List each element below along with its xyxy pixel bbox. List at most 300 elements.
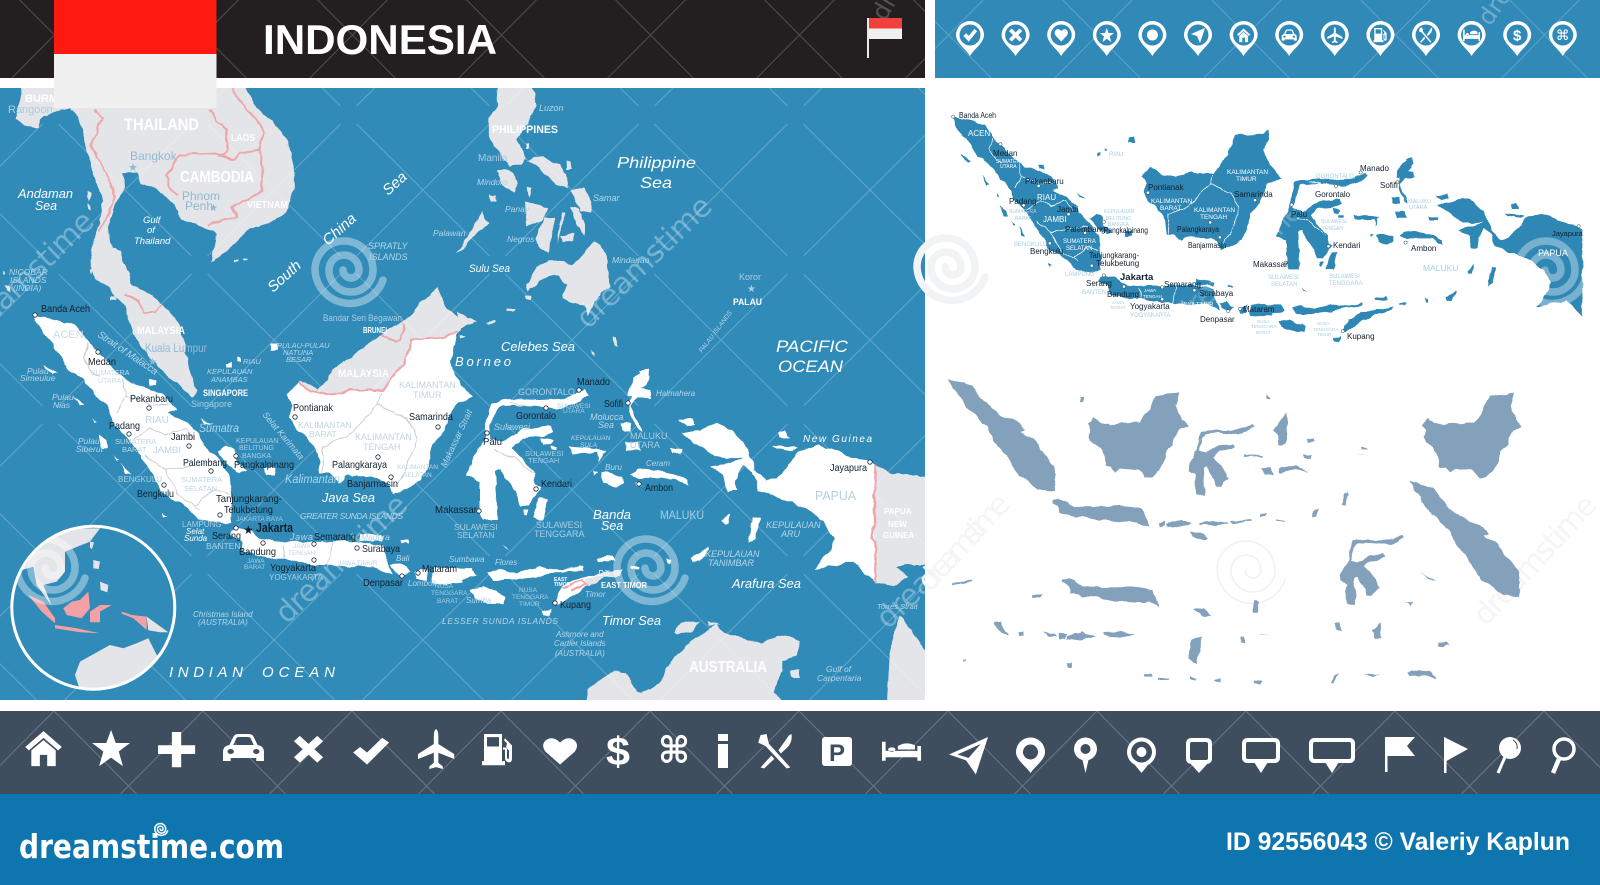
map labels: provinces and islands: YOGYAKARTA [269, 573, 323, 582]
labels: blue map provinces: KALIMANTAN [1227, 169, 1268, 176]
map: blue provinces [952, 111, 1585, 341]
icon: small flag [867, 18, 902, 58]
map labels: provinces and islands: Torres Strait [877, 602, 918, 611]
map labels: cities: Makassar [435, 504, 477, 516]
map labels: countries: TIMOR [554, 582, 570, 588]
map labels: capitals of neighbours: Singapore [191, 399, 232, 409]
labels: blue map provinces: SUMATERA [1063, 239, 1096, 245]
map labels: provinces and islands: NATUNA [283, 348, 313, 357]
map labels: provinces and islands: Sunda [184, 534, 208, 543]
labels: blue map cities: Palembang [1065, 225, 1105, 234]
map labels: provinces and islands: Nias [53, 400, 71, 410]
labels: blue map provinces: BARAT [1160, 205, 1181, 212]
map labels: provinces and islands: Negros [507, 234, 535, 244]
labels: blue map provinces [968, 129, 1568, 337]
map labels: cities: Kendari [541, 478, 572, 490]
map labels: cities: ★ [243, 523, 254, 537]
map labels: provinces and islands: Mindanao [612, 255, 650, 265]
map labels: provinces and islands: Pulau [52, 392, 74, 402]
map labels: countries: MALAYSIA [137, 325, 185, 337]
map labels: cities: Banjarmasin [347, 478, 398, 490]
map labels: provinces and islands: Simeulue [20, 373, 56, 383]
labels: blue map cities: Yogyakarta [1130, 302, 1170, 311]
map labels: capitals of neighbours: Phnom [182, 189, 220, 203]
Kalimantan piece one [1088, 391, 1188, 478]
labels: blue map provinces: GORONTALO [1316, 174, 1354, 180]
map labels: seas and oceans: Thailand [134, 236, 171, 247]
labels: blue map provinces: RIAU [1109, 152, 1123, 158]
map labels: capitals of neighbours [8, 104, 761, 409]
icon: info [718, 734, 728, 768]
panel: dark icon bar [0, 711, 1600, 794]
map labels: provinces and islands: Flores [495, 558, 517, 567]
image id and author: ID 92556043 © Valeriy Kaplun [1226, 828, 1570, 856]
icon: fuel pin [1366, 21, 1394, 56]
labels: blue map provinces: TENGGARA [1251, 324, 1276, 329]
map labels: provinces and islands: TENGAH [288, 550, 315, 557]
map labels: provinces and islands: TENGAH [363, 442, 401, 452]
map labels: provinces and islands: JAWA TIMUR [338, 560, 378, 567]
map labels: cities: Jambi [171, 431, 195, 443]
map labels: cities: Palembang [183, 457, 227, 469]
labels: blue map provinces: KALIMANTAN [1194, 207, 1235, 214]
map labels: seas and oceans: Sea [35, 198, 57, 213]
labels: blue map cities: Medan [993, 149, 1017, 158]
labels: blue map provinces: BELITUNG [1106, 216, 1131, 222]
map labels: provinces and islands: SELATAN [184, 484, 217, 493]
map labels: seas and oceans: Sulu Sea [469, 263, 510, 275]
panel: main map [0, 81, 1019, 707]
map labels: provinces and islands: ISLANDS [10, 275, 47, 285]
map labels: provinces and islands: LAMPUNG [182, 520, 222, 529]
icon: bed pin [1458, 21, 1486, 56]
map labels: cities: Tanjungkarang- [216, 493, 282, 505]
map labels: provinces and islands: ARU [780, 529, 801, 539]
icon: target pin [1127, 738, 1156, 773]
map labels: seas and oceans: Java Sea [321, 490, 375, 505]
map labels: countries: PALAU [733, 297, 762, 308]
map labels: provinces and islands: Ashmore and [555, 630, 604, 639]
map labels: provinces and islands: LESSER SUNDA ISLANDS [442, 616, 558, 626]
icon: callout [1242, 738, 1280, 773]
map labels: provinces and islands: SUMATERA [115, 437, 156, 446]
labels: blue map cities: Banjarmasin [1188, 241, 1226, 250]
map labels: provinces and islands: TENGGARA [534, 529, 585, 539]
icon: car [223, 734, 264, 761]
labels: blue map provinces: TIMUR [1236, 176, 1257, 183]
map labels: seas and oceans: Timor Sea [602, 613, 661, 628]
map labels: provinces and islands: JAKARTA RAYA [236, 516, 284, 523]
map labels: countries: GUINEA [883, 531, 914, 540]
map labels: provinces and islands: BARAT [437, 598, 458, 605]
map labels: cities: Jayapura [830, 462, 867, 474]
map labels: provinces and islands: MALUKU [660, 508, 704, 522]
map labels: cities: Surabaya [362, 543, 400, 555]
icon: flag [1385, 737, 1415, 772]
labels: blue map provinces: TENGAH [1143, 294, 1162, 299]
icon: map pin [1016, 738, 1045, 773]
land masses and borders [3, 81, 933, 707]
map labels: countries: CAMBODIA [180, 169, 254, 186]
map labels: provinces and islands: KEPULAUAN [571, 435, 611, 442]
map labels: provinces and islands: GORONTALO [518, 387, 575, 397]
labels: blue map cities: Denpasar [1200, 315, 1235, 324]
map labels: cities: Serang [212, 530, 241, 542]
labels: blue map cities: Semarang [1164, 280, 1201, 289]
map labels: provinces and islands: TIMUR [413, 390, 442, 400]
map labels: provinces and islands: UTARA [98, 378, 122, 385]
map labels: provinces and islands: Jawa [289, 532, 313, 542]
map labels: countries: PHILIPPINES [492, 124, 558, 136]
labels: blue map provinces: JAWA [1112, 300, 1124, 305]
map labels: provinces and islands: Pulau [27, 366, 49, 376]
map labels: capitals of neighbours: Penh [185, 199, 213, 213]
labels: blue map provinces: JAMBI [1043, 215, 1067, 224]
map labels: provinces and islands: Mindoro [477, 177, 508, 187]
map labels: countries: VIETNAM [247, 200, 288, 211]
map labels: countries: EAST TIMOR [601, 580, 647, 590]
icon: cross [294, 736, 323, 763]
map labels: seas and oceans: Sumatra [199, 421, 239, 435]
labels: blue map provinces: TENGGARA [1329, 281, 1363, 287]
map labels: seas and oceans: Arafura Sea [731, 576, 801, 591]
map labels: provinces and islands: GREATER SUNDA ISLANDS [300, 511, 403, 521]
map labels: provinces and islands: Lombok [408, 579, 437, 588]
map labels: cities: Ambon [645, 482, 673, 494]
labels: blue map cities: Ambon [1411, 244, 1436, 253]
map labels: provinces and islands: BANTEN [206, 541, 240, 551]
map labels: cities: Sofifi [604, 398, 623, 410]
map labels: provinces and islands: KALIMANTAN [355, 432, 412, 442]
map labels: seas and oceans [17, 155, 872, 681]
icon: check [353, 738, 389, 765]
icon: plus [158, 732, 195, 767]
map labels: provinces and islands: KEPULAUAN [207, 367, 253, 376]
Sulawesi piece one [1188, 425, 1254, 495]
map labels: seas and oceans: OCEAN [262, 664, 335, 681]
labels: blue map cities: Jambi [1057, 205, 1079, 214]
icon: car pin [1275, 21, 1303, 56]
icon: parking [822, 737, 852, 767]
map: grey-blue scattered islands [948, 379, 1522, 684]
map labels: countries: MALAYSIA [338, 368, 389, 380]
labels: blue map provinces: SELATAN [1066, 246, 1092, 252]
map labels: countries: BRUNEI [363, 326, 387, 335]
map labels: countries: EAST [554, 577, 567, 583]
map labels: cities: Semarang [314, 531, 356, 543]
map labels: countries: THAILAND [124, 115, 199, 134]
map labels: provinces and islands: KEPULAUAN [236, 438, 278, 445]
labels: blue map cities: Mataram [1243, 305, 1275, 314]
map labels: provinces and islands [9, 103, 918, 683]
labels: blue map cities: Palu [1291, 210, 1307, 219]
labels: blue map cities: Gorontalo [1315, 190, 1351, 199]
map labels: countries: BURM [25, 93, 58, 105]
map labels: seas and oceans: OCEAN [778, 358, 843, 376]
panel: main map: dreamstime [268, 487, 415, 631]
icon: bed [882, 742, 921, 761]
labels: blue map cities: Telukbetung [1096, 259, 1139, 268]
map labels: provinces and islands: Sulawesi [494, 422, 531, 432]
labels: blue map cities: Manado [1360, 164, 1389, 173]
map labels: provinces and islands: Madura [361, 532, 390, 542]
map labels: cities [41, 303, 867, 611]
map labels: countries: AUSTRALIA [689, 659, 767, 676]
labels: blue map cities: Palangkaraya [1177, 225, 1219, 234]
map labels: provinces and islands: ISLANDS [369, 252, 408, 262]
labels: blue map provinces: JAWA [1144, 288, 1156, 293]
icon: wide callout [1309, 738, 1355, 773]
labels: blue map provinces: SULAWESI [1329, 274, 1360, 280]
icon: dollar: $ [606, 730, 630, 774]
labels: blue map provinces: KALIMANTAN [1151, 198, 1192, 205]
faint watermarks on white area [910, 238, 1600, 632]
map labels: provinces and islands: JAWA [293, 543, 311, 550]
map labels: provinces and islands: MALUKU [630, 431, 668, 441]
labels: blue map provinces: JAWA TIMUR [1180, 302, 1213, 308]
map labels: cities: Pangkalpinang [234, 459, 294, 471]
labels: blue map cities: Makassar [1253, 260, 1288, 269]
map labels: countries: PAPUA [884, 507, 912, 516]
labels: blue map provinces: NUSA [1317, 321, 1330, 326]
map labels: cities: Gorontalo [516, 410, 556, 422]
map labels: provinces and islands: BARAT [309, 429, 337, 439]
icon: cross pin [1002, 21, 1030, 56]
map labels: provinces and islands: TENGGARA [512, 594, 549, 601]
map labels: seas and oceans: INDIAN [169, 664, 243, 681]
map labels: seas and oceans: Banda [593, 508, 631, 522]
map labels: cities: Denpasar [363, 577, 403, 589]
map labels: provinces and islands: SULAWESI [536, 520, 582, 530]
map labels: countries: LAOS [231, 133, 255, 144]
map labels: seas and oceans: China [319, 210, 360, 249]
icon: fuel [482, 734, 512, 765]
map labels: provinces and islands: Cartier Islands [554, 639, 606, 648]
map labels: cities: Padang [109, 420, 140, 432]
labels: blue map provinces: RIAU [1037, 193, 1056, 202]
labels: blue map provinces: SELATAN [1271, 282, 1297, 288]
map labels: provinces and islands: (INDIA) [13, 283, 42, 293]
labels: blue map provinces: MALUKU [1423, 263, 1458, 273]
labels: blue map provinces: NUSA [1257, 319, 1270, 324]
map labels: provinces and islands: SULAWESI [525, 449, 563, 458]
map labels: seas and oceans: Sea [640, 175, 672, 192]
map labels: provinces and islands: Bali [396, 554, 410, 563]
labels: blue map cities: Surabaya [1199, 289, 1234, 298]
labels: blue map provinces: SULAWESI [1321, 219, 1347, 225]
map labels: provinces and islands: Siberut [76, 444, 104, 454]
map labels: provinces and islands: Timor [585, 590, 606, 599]
map labels: cities: Bengkulu [137, 488, 174, 500]
map labels: countries: NEW [888, 520, 907, 529]
map labels: cities: Yogyakarta [270, 562, 316, 574]
map labels: provinces and islands: Sumba [466, 596, 492, 605]
icon: pennant [1444, 737, 1468, 773]
map labels: provinces and islands: KALIMANTAN [298, 420, 352, 430]
map labels: seas and oceans: Borneo [455, 354, 511, 369]
labels: blue map provinces: SUMATERA [996, 159, 1024, 165]
labels: blue map cities: Kendari [1333, 241, 1361, 250]
labels: blue map provinces: BANGKA [1108, 222, 1130, 228]
map labels: provinces and islands: BELITUNG [239, 445, 274, 452]
icon: plane [418, 729, 454, 769]
map labels: provinces and islands: Strait of Malacca [95, 329, 160, 378]
map labels: cities: Pekanbaru [130, 393, 173, 405]
icon: needle pin [1074, 738, 1097, 773]
icon: star [92, 730, 130, 766]
map labels: seas and oceans: Sea [379, 168, 411, 199]
icon: home [25, 731, 62, 766]
map labels: capitals of neighbours: ★ [128, 162, 138, 174]
icon: heart [543, 738, 577, 765]
map labels: provinces and islands: (AUSTRALIA) [555, 649, 605, 658]
labels: blue map provinces: PAPUA [1538, 248, 1568, 258]
map labels: provinces and islands: Panay [505, 204, 530, 214]
map labels: cities: Mataram [422, 563, 457, 575]
labels: blue map provinces: TENGAH [1322, 226, 1343, 232]
icon: navigation [949, 737, 988, 774]
map labels: provinces and islands: TIMUR [519, 601, 540, 608]
labels: blue map cities: Padang [1009, 197, 1037, 206]
map labels: provinces and islands: PULAU-PULAU [277, 341, 330, 350]
map labels: provinces and islands: SUMATERA [181, 475, 222, 484]
map labels: capitals of neighbours: Bangkok [130, 149, 178, 163]
labels: blue map provinces: TIMUR [1317, 332, 1332, 337]
faint watermarks on white area: dreamstime [910, 487, 1018, 598]
labels: blue map provinces: BARAT [1015, 216, 1031, 222]
map labels: cities: Banda Aceh [41, 303, 90, 315]
map labels: seas and oceans: of [147, 225, 156, 236]
Java piece two [1062, 579, 1159, 607]
map labels: provinces and islands: NICOBAR [9, 267, 48, 277]
map labels: provinces and islands: TENGGARA [431, 590, 468, 597]
icon: dot pin [1138, 21, 1166, 56]
labels: blue map provinces: UTARA [1409, 205, 1428, 211]
labels: blue map provinces: SUMATERA [1009, 209, 1037, 215]
labels: blue map provinces: UTARA [1000, 164, 1017, 170]
labels: blue map provinces: BENGKULU [1014, 242, 1047, 248]
icon: dollar pin: $ [1513, 28, 1522, 44]
panel: main map: dreamstime [569, 189, 719, 336]
labels: blue map provinces: ACEN [968, 129, 990, 138]
map labels: provinces and islands: BENGKULU [118, 475, 162, 484]
map labels: provinces and islands: KEPULAUAN [705, 549, 760, 559]
labels: blue map cities [959, 111, 1584, 341]
small island pieces [951, 393, 1449, 684]
icon: command pin: ⌘ [1556, 28, 1570, 44]
map labels: provinces and islands: SULAWESI [557, 403, 591, 410]
icon: command pin [1549, 21, 1577, 56]
map: blue provinces: dreamstime [1167, 193, 1310, 333]
icon: ball pin [1498, 737, 1521, 773]
map labels: provinces and islands: JAMBI [153, 445, 181, 456]
locator globe [10, 526, 175, 690]
labels: blue map cities: Banda Aceh [959, 111, 996, 120]
icon: cutlery pin [1412, 21, 1440, 56]
labels: blue map provinces: MALUKU [1408, 199, 1431, 205]
map labels: provinces and islands: Makassar Strait [439, 408, 474, 469]
map labels: provinces and islands: TENGAH [528, 456, 559, 465]
footer logo: dreamstime.com [19, 827, 284, 866]
map labels: provinces and islands: PALAU ISLANDS [698, 309, 734, 354]
map labels: provinces and islands: KALIMANTAN [397, 464, 438, 471]
map labels: provinces and islands: Samar [593, 193, 621, 203]
map labels: provinces and islands: ACEN [53, 329, 84, 341]
map labels: provinces and islands: SUMATERA [91, 370, 130, 377]
watermark swirl: banda sea [617, 539, 685, 601]
map labels: seas and oceans: New Guinea [803, 434, 872, 445]
map labels: cities: Bandung [239, 546, 276, 558]
Java piece one [1052, 499, 1149, 527]
icon: cutlery [758, 734, 792, 769]
map labels: provinces and islands: TANIMBAR [708, 558, 754, 568]
map labels: seas and oceans: Gulf [143, 215, 162, 226]
map labels: capitals of neighbours: Koror [739, 272, 761, 282]
labels: blue map provinces: KEPULAUAN [1104, 209, 1135, 215]
map labels: provinces and islands: SELATAN [403, 472, 432, 479]
map labels: provinces and islands: BESAR [286, 355, 312, 364]
map labels: capitals of neighbours: ★ [209, 203, 218, 214]
map labels: seas and oceans: Celebes Sea [501, 340, 575, 354]
map labels: seas and oceans: PACIFIC [776, 338, 848, 356]
watermark swirl: south china sea [315, 241, 383, 303]
map labels: provinces and islands: BARAT [244, 564, 265, 571]
map labels: cities: Palangkaraya [332, 459, 387, 471]
map labels: cities: Samarinda [409, 411, 453, 423]
icon: star pin [1093, 21, 1121, 56]
map labels: seas and oceans: Philippine [617, 155, 696, 172]
map labels: cities: Kupang [560, 599, 591, 611]
labels: blue map cities: Serang [1086, 279, 1112, 288]
map labels: provinces and islands: Ceram [646, 459, 670, 468]
labels: blue map provinces: LAMPUNG [1065, 272, 1095, 278]
flag of Indonesia [54, 0, 216, 108]
Sulawesi piece two [1339, 535, 1405, 605]
map labels: provinces and islands: RIAU [243, 357, 262, 366]
map labels: provinces and islands: SULA [580, 442, 597, 449]
map labels: provinces and islands: Carpentaria [817, 673, 862, 683]
map labels: provinces and islands: Buru [605, 463, 622, 472]
labels: blue map provinces: TENGGARA [1313, 327, 1338, 332]
title bar [0, 0, 925, 78]
map labels: provinces and islands: PAPUA [815, 488, 856, 503]
labels: blue map cities: Jakarta [1120, 272, 1154, 283]
map labels: provinces and islands: RIAU [145, 415, 169, 426]
labels: blue map provinces: SULAWESI [1268, 275, 1299, 281]
icon: dollar pin [1503, 21, 1531, 56]
map labels: provinces and islands: UTARA [563, 408, 585, 415]
icon: heart pin [1047, 21, 1075, 56]
labels: blue map cities: Bandung [1107, 290, 1139, 299]
map labels: provinces and islands: KEPULAUAN [766, 520, 821, 530]
labels: blue map cities: Pangkalpinang [1104, 226, 1148, 235]
labels: blue map provinces: TENGAH [1200, 214, 1227, 221]
Sumatra piece one [948, 379, 1055, 491]
map labels: cities: Manado [577, 376, 610, 388]
map labels: capitals of neighbours: Bandar Seri Begawan [323, 313, 402, 324]
map labels: countries: SINGAPORE [203, 388, 248, 398]
footer band [0, 794, 1600, 885]
icon: plane pin [1321, 21, 1349, 56]
map labels: provinces and islands: SELATAN [457, 530, 494, 540]
map labels: cities: Palu [483, 436, 502, 448]
icon: parking: P [829, 740, 845, 767]
map labels: seas and oceans: Sea [601, 519, 623, 533]
map labels: provinces and islands: JAWA [247, 558, 265, 565]
map labels: capitals of neighbours: Rangoon [8, 104, 53, 116]
map labels: capitals of neighbours: ★ [747, 284, 756, 295]
map labels: provinces and islands: Gulf of [826, 664, 853, 674]
